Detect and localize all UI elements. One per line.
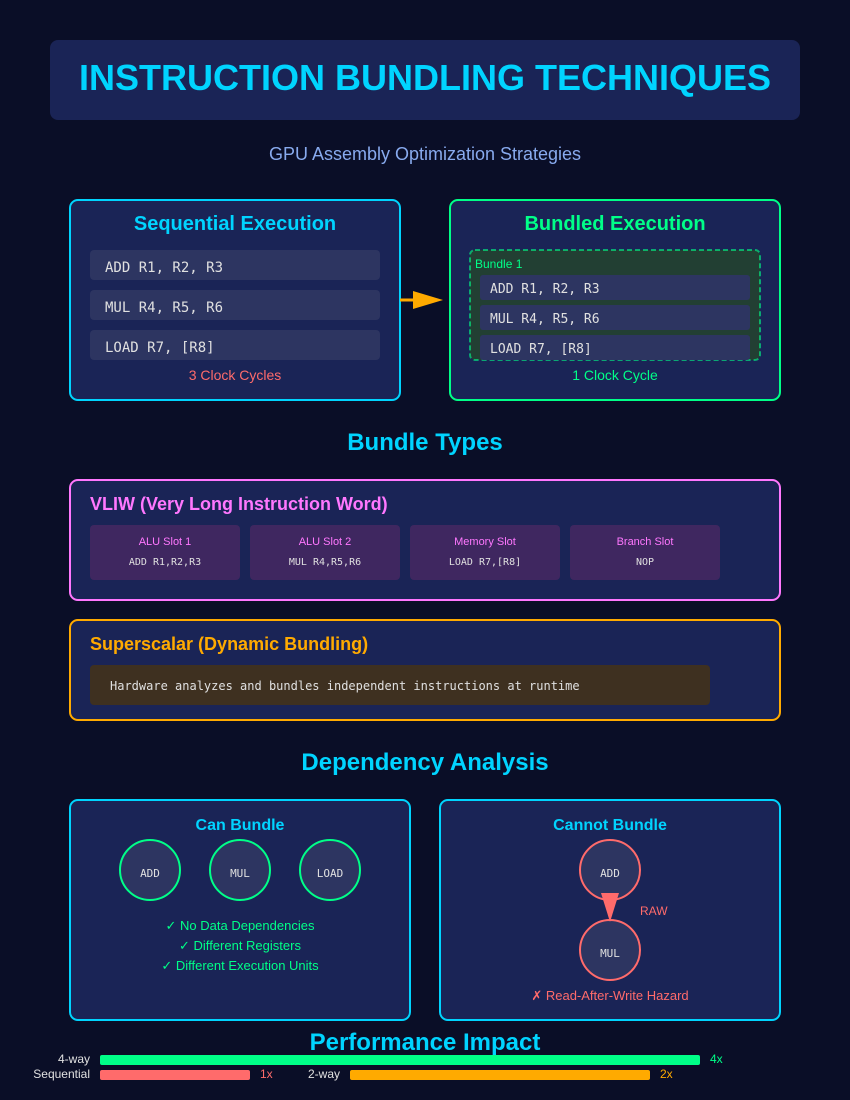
label: raw: RAW bbox=[640, 904, 668, 918]
heading: bundle types: Bundle Types bbox=[347, 429, 503, 456]
bundle label: Bundle 1 bbox=[475, 257, 523, 271]
node: add: ADD bbox=[600, 867, 620, 880]
instruction: mul bbox=[480, 305, 750, 330]
node: add: ADD bbox=[140, 867, 160, 880]
slot: memory: LOAD R7,[R8] bbox=[449, 557, 521, 568]
bar: sequential: 1x bbox=[260, 1067, 273, 1081]
instruction: load bbox=[480, 335, 750, 360]
heading: performance impact: Performance Impact bbox=[310, 1029, 540, 1056]
description: superscalar bbox=[90, 665, 710, 705]
instruction: load: LOAD R7, [R8] bbox=[490, 342, 592, 357]
instruction: load bbox=[90, 330, 380, 360]
bundle group bbox=[470, 250, 760, 360]
instruction: mul: MUL R4, R5, R6 bbox=[490, 312, 600, 327]
heading: vliw: VLIW (Very Long Instruction Word) bbox=[90, 494, 388, 514]
node: add bbox=[120, 840, 180, 900]
instruction: load: LOAD R7, [R8] bbox=[105, 340, 215, 356]
bar: 4-way bbox=[58, 1052, 723, 1066]
panel: cannot bundle bbox=[440, 800, 780, 1020]
bar: sequential: Sequential bbox=[33, 1067, 90, 1081]
node: add bbox=[580, 840, 640, 900]
panel: can bundle bbox=[70, 800, 410, 1020]
slot: alu 1 bbox=[90, 525, 240, 580]
slot: branch: NOP bbox=[636, 557, 654, 568]
node: mul: MUL bbox=[600, 947, 620, 960]
instruction: mul bbox=[90, 290, 380, 320]
instruction: mul: MUL R4, R5, R6 bbox=[105, 300, 223, 316]
panel: vliw bbox=[70, 480, 780, 600]
heading: sequential execution: Sequential Execution bbox=[134, 213, 336, 235]
node: load: LOAD bbox=[317, 867, 343, 880]
arrow: sequential to bundled bbox=[400, 291, 443, 309]
heading: can bundle: Can Bundle bbox=[196, 817, 285, 834]
list: bundling conditions bbox=[161, 918, 319, 973]
title: INSTRUCTION BUNDLING TECHNIQUES bbox=[79, 57, 771, 98]
panel: sequential execution bbox=[70, 200, 400, 400]
panel: bundled execution bbox=[450, 200, 780, 400]
slot: alu 1: ADD R1,R2,R3 bbox=[129, 557, 201, 568]
instruction: add: ADD R1, R2, R3 bbox=[105, 260, 223, 276]
list: bundling conditions: ✓ No Data Dependencies bbox=[166, 918, 315, 933]
subtitle: GPU Assembly Optimization Strategies bbox=[269, 144, 581, 164]
panel: superscalar bbox=[70, 620, 780, 720]
list: bundling conditions: ✓ Different Registers bbox=[179, 938, 301, 953]
heading: bundled execution: Bundled Execution bbox=[524, 213, 706, 235]
instruction: add bbox=[480, 275, 750, 300]
heading: superscalar: Superscalar (Dynamic Bundling) bbox=[90, 634, 368, 654]
heading: dependency analysis: Dependency Analysis bbox=[301, 749, 549, 776]
slot: memory: Memory Slot bbox=[454, 536, 516, 548]
node: mul bbox=[210, 840, 270, 900]
list: bundling conditions: ✓ Different Execution Units bbox=[161, 958, 319, 973]
instruction: add bbox=[90, 250, 380, 280]
description: superscalar: Hardware analyzes and bundles independent instructions at runtime bbox=[110, 679, 580, 693]
slot: alu 2 bbox=[250, 525, 400, 580]
slot: branch bbox=[570, 525, 720, 580]
bar: sequential bbox=[33, 1067, 273, 1081]
arrow: dependency bbox=[601, 893, 619, 922]
bar: 4-way: 4-way bbox=[58, 1052, 90, 1066]
instruction: add: ADD R1, R2, R3 bbox=[490, 282, 600, 297]
node: mul bbox=[580, 920, 640, 980]
cycle count: sequential: 3 Clock Cycles bbox=[189, 367, 281, 383]
slot: branch: Branch Slot bbox=[617, 536, 673, 548]
node: load bbox=[300, 840, 360, 900]
slot: alu 1: ALU Slot 1 bbox=[139, 536, 191, 548]
bar: 4-way: 4x bbox=[710, 1052, 723, 1066]
slot: memory bbox=[410, 525, 560, 580]
hazard note: ✗ Read-After-Write Hazard bbox=[531, 988, 689, 1003]
slot: alu 2: MUL R4,R5,R6 bbox=[289, 557, 361, 568]
bar: 2-way: 2x bbox=[660, 1067, 673, 1081]
bar: 2-way: 2-way bbox=[308, 1067, 340, 1081]
title bbox=[50, 40, 800, 120]
node: mul: MUL bbox=[230, 867, 250, 880]
bar: 2-way bbox=[308, 1067, 673, 1081]
cycle count: bundled: 1 Clock Cycle bbox=[572, 367, 658, 383]
heading: cannot bundle: Cannot Bundle bbox=[553, 817, 667, 834]
slot: alu 2: ALU Slot 2 bbox=[299, 536, 351, 548]
